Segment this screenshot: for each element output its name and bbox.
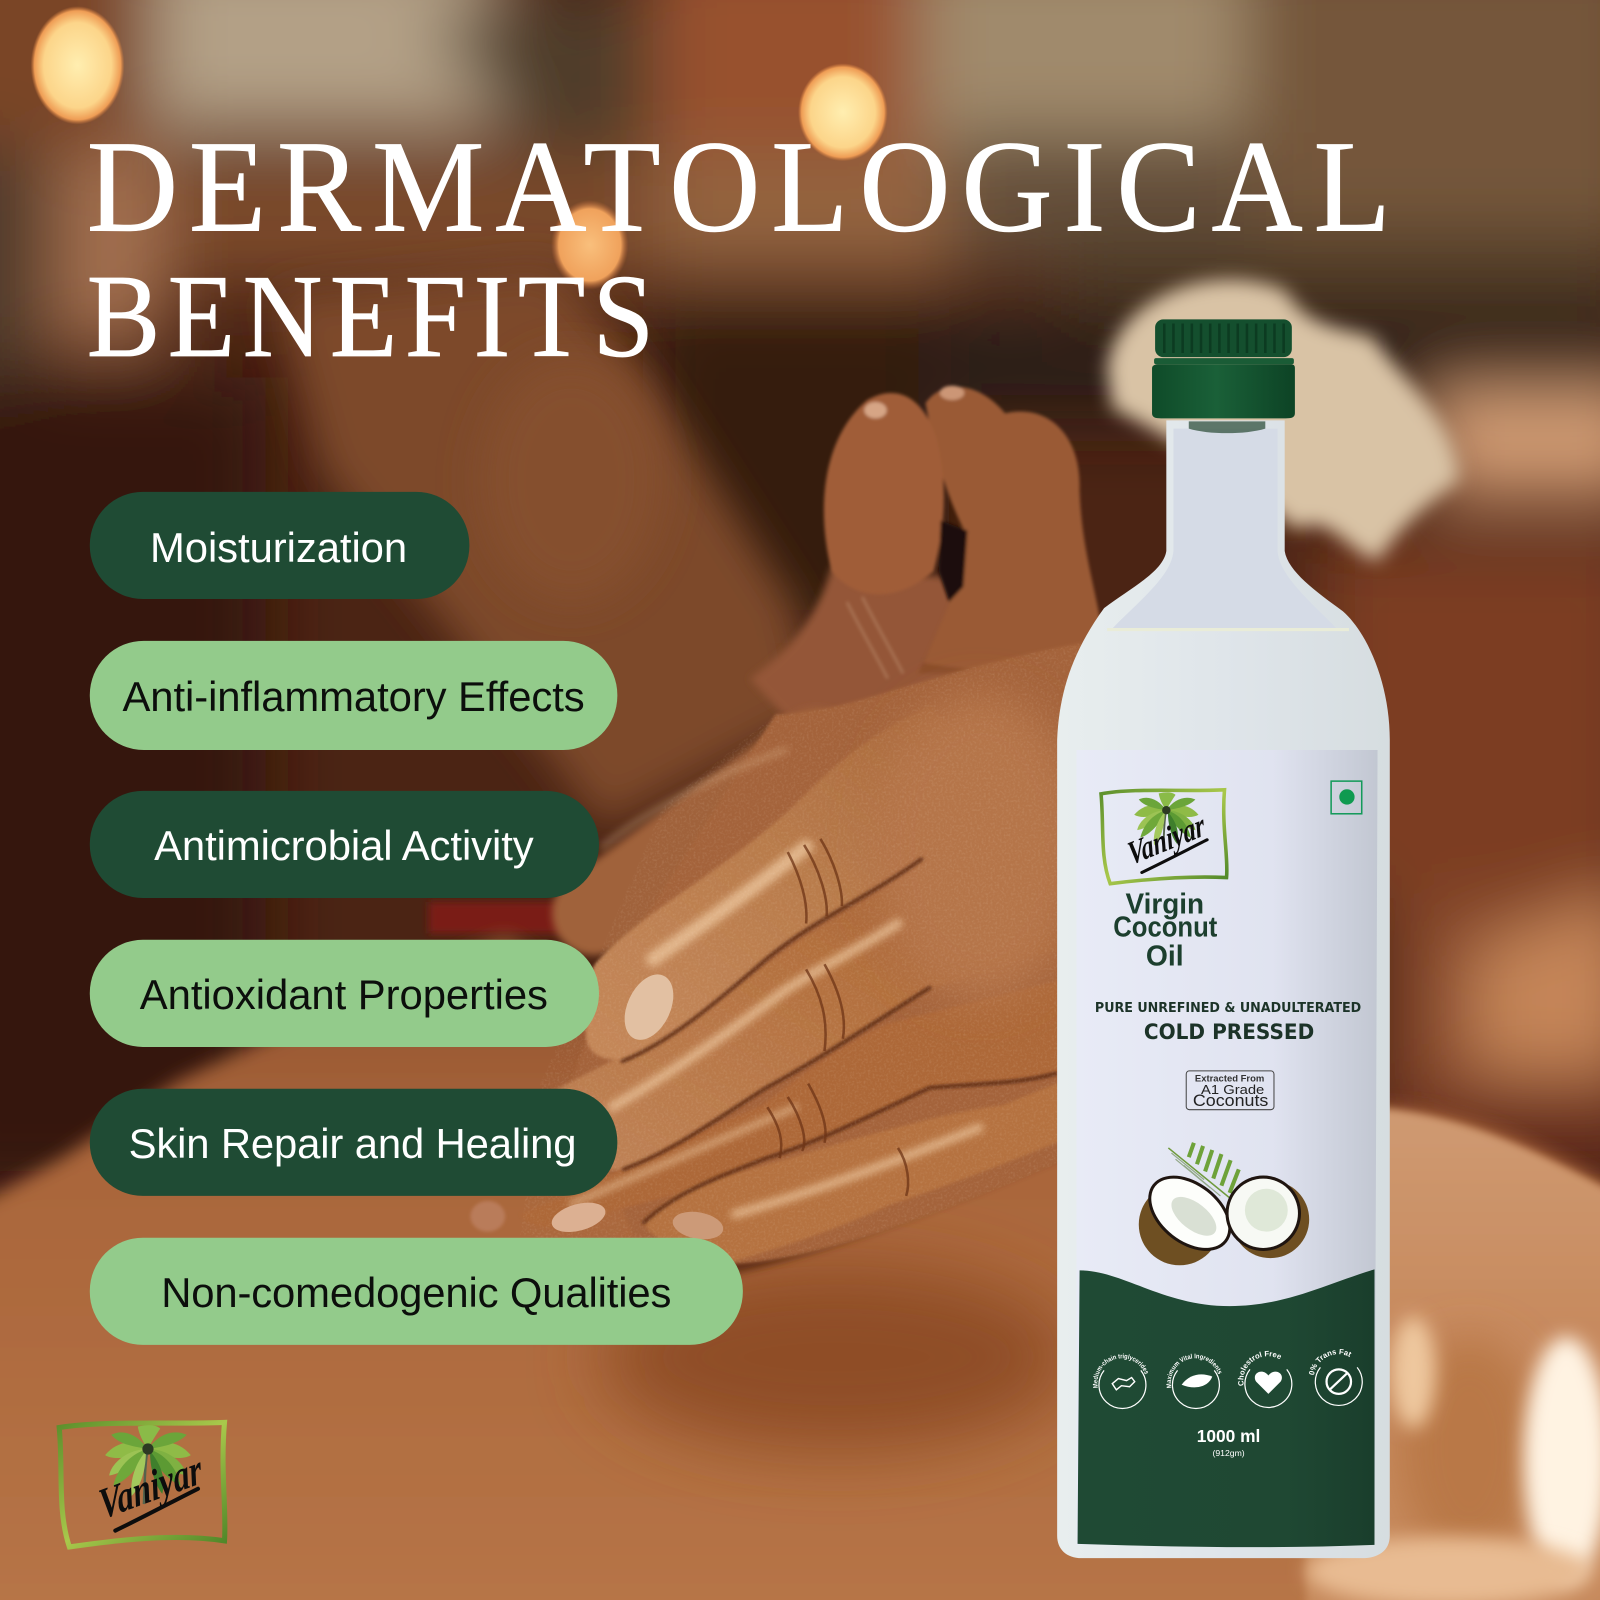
A1 grade badge	[1186, 1071, 1274, 1110]
skin highlights	[571, 750, 980, 1214]
title: DERMATOLOGICAL BENEFITS: DERMATOLOGICAL	[87, 113, 1391, 259]
A1 grade badge: Coconuts	[1193, 1092, 1268, 1110]
back of hand light	[872, 694, 1087, 1000]
label	[1077, 750, 1378, 1548]
label wave: dark green band	[1078, 1269, 1374, 1547]
background: shell	[1107, 280, 1459, 561]
title: DERMATOLOGICAL BENEFITS	[87, 113, 1391, 382]
product name	[1113, 888, 1218, 972]
product name: Coconut	[1113, 912, 1218, 944]
pill: Antimicrobial Activity: Antimicrobial Activity	[154, 822, 534, 869]
fingers	[520, 706, 1061, 1263]
background: massaging hands	[470, 386, 1102, 1286]
product: coconut oil bottle	[1057, 319, 1390, 1558]
benefit icons	[1099, 1367, 1362, 1408]
behind finger	[594, 750, 816, 913]
product name: Oil	[1146, 940, 1184, 972]
pill: Moisturization	[90, 492, 469, 599]
claim text: PURE UNREFINED & UNADULTERATED	[1095, 1001, 1361, 1016]
benefit pills	[90, 492, 743, 1345]
veg mark	[1331, 781, 1362, 814]
icon label: Cholestrol Free: Cholestrol Free	[1238, 1350, 1281, 1386]
pill: Non-comedogenic Qualities	[90, 1238, 743, 1345]
skin gloss grain	[510, 633, 1092, 1286]
logo: Vaniyar bottom left	[59, 1422, 225, 1547]
upright fingers	[750, 566, 985, 740]
bottle cap	[1152, 319, 1295, 418]
A1 grade badge: A1 Grade	[1201, 1082, 1264, 1097]
claim text	[1095, 1001, 1361, 1045]
pill: Antimicrobial Activity	[90, 791, 599, 898]
net volume	[1197, 1426, 1260, 1458]
coconuts	[1134, 1160, 1309, 1266]
logo: Vaniyar on label: Vaniyar	[1125, 807, 1209, 873]
knuckle creases	[767, 839, 908, 1196]
pill: Anti-inflammatory Effects	[90, 641, 617, 750]
background: blurred forearm	[276, 265, 816, 827]
hand mass	[571, 643, 1082, 1263]
claim text: COLD PRESSED	[1144, 1020, 1314, 1045]
pill: Anti-inflammatory Effects: Anti-inflammatory Effects	[122, 673, 585, 720]
background: candle glows	[31, 6, 124, 124]
finger shadows	[622, 859, 1056, 1222]
finger nails	[615, 967, 683, 1048]
icon label: Medium-chain triglycerides: Medium-chain triglycerides	[1092, 1354, 1148, 1388]
palm frond	[1168, 1143, 1240, 1206]
shadow under hand	[726, 1151, 1057, 1269]
icon label: 0% Trans Fat: 0% Trans Fat	[1309, 1349, 1352, 1375]
background: lower back	[0, 935, 1600, 1600]
pill: Antioxidant Properties	[90, 940, 599, 1047]
pill: Antioxidant Properties: Antioxidant Properties	[140, 971, 548, 1018]
bottle glass	[1057, 420, 1390, 1558]
pill: Skin Repair and Healing: Skin Repair and Healing	[129, 1120, 577, 1167]
pill: Non-comedogenic Qualities: Non-comedogenic Qualities	[161, 1269, 671, 1316]
pill: Moisturization: Moisturization	[150, 524, 407, 571]
A1 grade badge: Extracted From	[1195, 1074, 1264, 1084]
logo: Vaniyar bottom left: Vaniyar	[96, 1445, 206, 1529]
product name: Virgin	[1126, 888, 1204, 920]
background: lit right shoulder	[1306, 1107, 1600, 1600]
icon label: Maximum Vital Ingredients: Maximum Vital Ingredients	[1166, 1354, 1222, 1388]
logo: Vaniyar on label	[1101, 790, 1227, 884]
bottle neck	[1112, 429, 1337, 629]
pill: Skin Repair and Healing	[90, 1089, 617, 1196]
net volume: (912gm)	[1212, 1448, 1245, 1458]
net volume: 1000 ml	[1197, 1426, 1260, 1446]
title: DERMATOLOGICAL BENEFITS: BENEFITS	[87, 250, 654, 382]
